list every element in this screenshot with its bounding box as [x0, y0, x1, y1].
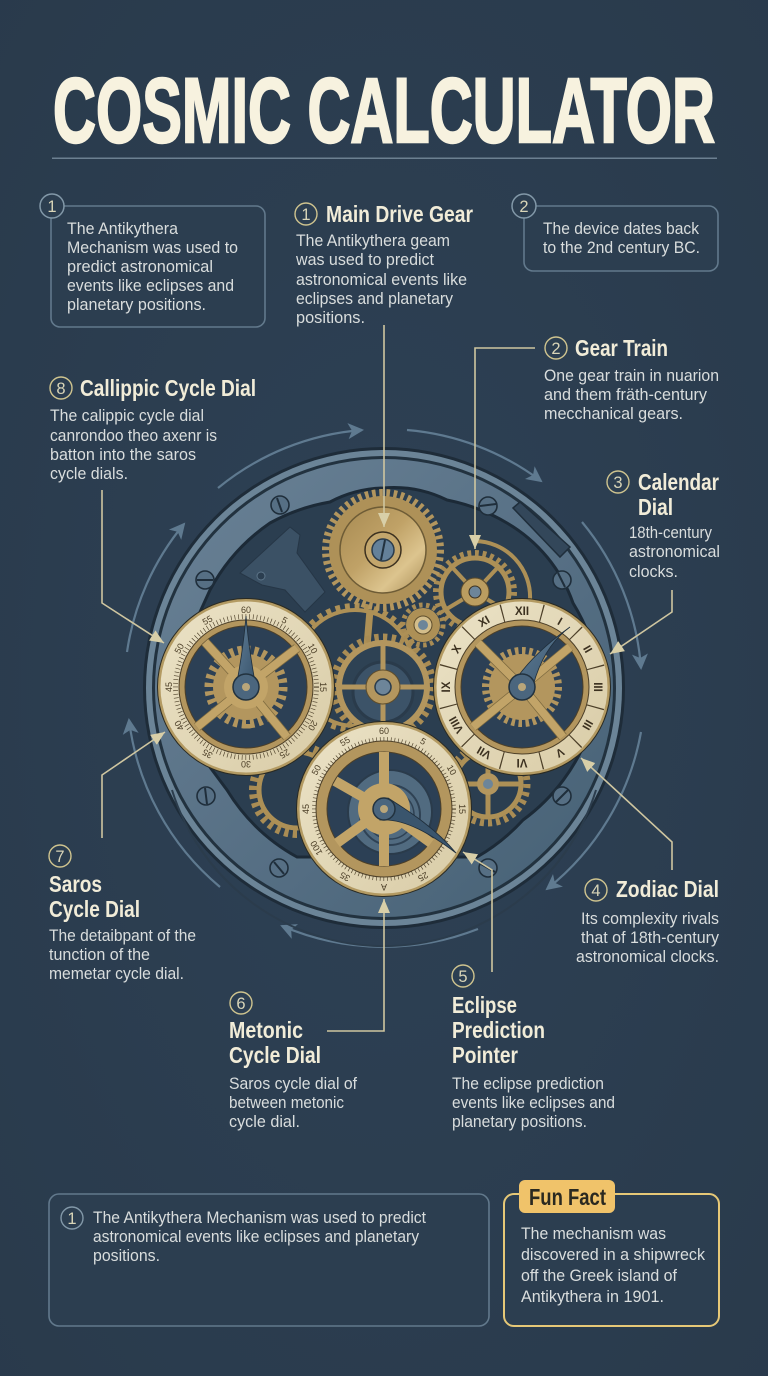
- gear: lower right: [449, 745, 527, 823]
- numerals: right dial: V: [553, 745, 566, 759]
- outer ring: [143, 447, 625, 946]
- badge 5: 5: [458, 968, 468, 986]
- badge 4: 4: [591, 882, 601, 900]
- badge: note number: 1: [67, 1210, 77, 1228]
- numerals: right dial: X: [450, 643, 464, 656]
- badge 6: 6: [236, 995, 246, 1013]
- numerals: right dial: II: [580, 644, 594, 655]
- text: box 1 copy: The Antikythera: [67, 219, 179, 238]
- numerals: right dial: VII: [475, 743, 494, 761]
- heading: Dial: [638, 494, 673, 520]
- description: mecchanical gears.: [544, 404, 683, 423]
- heading: Main Drive Gear: [326, 201, 473, 227]
- panel: fact box 1: [40, 194, 265, 327]
- heading: Eclipse: [452, 992, 517, 1018]
- text: fun fact copy: Antikythera in 1901.: [521, 1287, 664, 1306]
- inner opening: [160, 488, 598, 857]
- description: [229, 1074, 357, 1131]
- text: fun fact copy: The mechanism was: [521, 1224, 666, 1243]
- numerals: left dial: 15: [318, 682, 328, 692]
- badge: number 2: [512, 194, 536, 218]
- label: gear train: [544, 335, 719, 423]
- badge 5: [452, 965, 474, 987]
- text: note copy: [93, 1208, 426, 1265]
- numerals: right dial: III: [591, 682, 603, 692]
- numerals: right dial: IX: [441, 681, 453, 692]
- description: that of 18th-century: [581, 928, 719, 947]
- heading: Gear Train: [575, 335, 668, 361]
- heading: Saros: [49, 871, 102, 897]
- heading: Metonic: [229, 1017, 303, 1043]
- numerals: bottom dial: 60: [379, 726, 389, 736]
- title rule: [52, 158, 717, 159]
- description: One gear train in nuarion: [544, 366, 719, 385]
- description: astronomical clocks.: [576, 947, 719, 966]
- numerals: left dial: 35: [201, 747, 214, 761]
- badge: number 2: 2: [519, 198, 529, 216]
- panel: fun fact: [504, 1180, 719, 1326]
- numerals: bottom dial: 5: [418, 736, 428, 747]
- badge 7: [49, 845, 71, 867]
- description: [629, 523, 720, 581]
- description: planetary positions.: [452, 1112, 587, 1131]
- description: [576, 909, 719, 966]
- gear: center: [333, 637, 433, 737]
- numerals: bottom dial: [301, 726, 467, 892]
- numerals: left dial: 10: [306, 642, 320, 655]
- badge 2: 2: [551, 340, 561, 358]
- badge: fun fact: [519, 1180, 615, 1213]
- badge 1: 1: [301, 206, 311, 224]
- dial: left (callippic): [157, 598, 335, 776]
- numerals: left dial: 40: [172, 719, 186, 732]
- gear: main drive: [326, 493, 440, 607]
- description: [544, 366, 719, 423]
- label: calendar dial: [607, 469, 720, 581]
- numerals: bottom dial: 55: [338, 735, 352, 748]
- heading: [452, 992, 545, 1068]
- heading: Pointer: [452, 1042, 518, 1068]
- plate bridge: [240, 527, 325, 612]
- gear: gear train: [436, 553, 514, 631]
- numerals: left dial: 25: [278, 747, 291, 761]
- numerals: bottom dial: 50: [310, 763, 323, 777]
- description: batton into the saros: [50, 445, 196, 464]
- numerals: right dial: XII: [515, 606, 529, 618]
- numerals: bottom dial: 100: [308, 839, 325, 857]
- numerals: left dial: 45: [164, 682, 174, 692]
- numerals: right dial: III: [579, 717, 595, 732]
- numerals: right dial: VIII: [448, 714, 467, 735]
- badge: fun fact: Fun Fact: [529, 1184, 606, 1210]
- badge 7: 7: [55, 848, 65, 866]
- heading: [49, 871, 140, 922]
- label: eclipse prediction pointer: [452, 965, 615, 1131]
- label: callippic cycle dial: [50, 375, 256, 483]
- badge: number 1: 1: [47, 198, 57, 216]
- heading: Cycle Dial: [229, 1042, 321, 1068]
- description: astronomical: [629, 542, 720, 561]
- gear: lower left: [253, 746, 341, 834]
- panel: fact box 2: [512, 194, 718, 271]
- orbit arrows around mechanism: [127, 430, 641, 947]
- description: The eclipse prediction: [452, 1074, 604, 1093]
- badge 4: [585, 879, 607, 901]
- badge: number 1: [40, 194, 64, 218]
- description: Its complexity rivals: [581, 909, 719, 928]
- heading: Prediction: [452, 1017, 545, 1043]
- text: box 1 copy: events like eclipses and: [67, 276, 234, 295]
- badge 8: [50, 377, 72, 399]
- description: cycle dials.: [50, 464, 128, 483]
- numerals: left dial: 5: [280, 615, 289, 626]
- text: box 2 copy: to the 2nd century BC.: [543, 238, 700, 257]
- numerals: left dial: 50: [172, 642, 186, 655]
- heading: Calendar: [638, 469, 719, 495]
- panel: bottom note: [49, 1194, 489, 1326]
- heading: [229, 1017, 321, 1068]
- text: fun fact copy: [521, 1224, 705, 1306]
- label: zodiac dial: [576, 876, 719, 966]
- heading: Zodiac Dial: [616, 876, 719, 902]
- description: between metonic: [229, 1093, 344, 1112]
- dial: right (calendar): [433, 598, 611, 776]
- badge: note number: [61, 1207, 83, 1229]
- label: main drive gear: [295, 201, 473, 327]
- description: events like eclipses and: [452, 1093, 615, 1112]
- gear train: linkage arcs: [293, 541, 530, 730]
- numerals: bottom dial: A: [381, 882, 387, 892]
- description: canrondoo theo axenr is: [50, 426, 217, 445]
- description: memetar cycle dial.: [49, 964, 184, 983]
- text: box 2 copy: The device dates back: [543, 219, 699, 238]
- text: note copy: astronomical events like eclipses and planetary: [93, 1227, 419, 1246]
- screws: [196, 496, 571, 877]
- text: box 1 copy: Mechanism was used to: [67, 238, 238, 257]
- description: The detaibpant of the: [49, 926, 196, 945]
- text: box 2 copy: [543, 219, 700, 257]
- description: eclipses and planetary: [296, 289, 453, 308]
- heading: Callippic Cycle Dial: [80, 375, 256, 401]
- heading: Cycle Dial: [49, 896, 140, 922]
- text: fun fact copy: discovered in a shipwreck: [521, 1245, 705, 1264]
- description: The Antikythera geam: [296, 231, 450, 250]
- text: note copy: positions.: [93, 1246, 160, 1265]
- numerals: bottom dial: 45: [301, 804, 311, 814]
- numerals: right dial: VI: [517, 756, 527, 768]
- description: [50, 406, 217, 483]
- badge 2: [545, 337, 567, 359]
- numerals: left dial: [164, 605, 328, 769]
- numerals: right dial: XI: [477, 614, 492, 630]
- numerals: bottom dial: 10: [445, 763, 458, 777]
- description: [49, 926, 196, 983]
- badge 1: [295, 203, 317, 225]
- gear: small idler: [403, 605, 443, 645]
- description: [452, 1074, 615, 1131]
- numerals: left dial: 60: [241, 605, 251, 615]
- numerals: left dial: 20: [306, 719, 320, 732]
- description: Saros cycle dial of: [229, 1074, 357, 1093]
- description: tunction of the: [49, 945, 150, 964]
- numerals: bottom dial: 25: [416, 870, 430, 883]
- numerals: right dial: I: [555, 616, 564, 628]
- dial: bottom (metonic): [296, 721, 472, 897]
- numerals: left dial: 30: [241, 759, 251, 769]
- description: cycle dial.: [229, 1112, 300, 1131]
- label: saros cycle dial: [49, 845, 196, 983]
- mechanism illustration: [143, 447, 625, 946]
- description: and them fräth-century: [544, 385, 707, 404]
- numerals: right dial: [441, 606, 603, 768]
- description: [295, 231, 467, 327]
- badge 3: 3: [613, 474, 623, 492]
- badge 8: 8: [56, 380, 66, 398]
- description: clocks.: [629, 562, 678, 581]
- text: box 1 copy: predict astronomical: [67, 257, 213, 276]
- description: 18th-century: [629, 523, 712, 542]
- label: metonic cycle dial: [229, 992, 357, 1131]
- text: box 1 copy: planetary positions.: [67, 295, 206, 314]
- text: fun fact copy: off the Greek island of: [521, 1266, 677, 1285]
- heading: [638, 469, 719, 520]
- numerals: left dial: 55: [201, 613, 214, 627]
- numerals: bottom dial: 35: [338, 870, 352, 883]
- leader lines with arrows: [102, 325, 672, 1031]
- text: note copy: The Antikythera Mechanism was used to predict: [93, 1208, 426, 1227]
- description: positions.: [296, 308, 365, 327]
- text: box 1 copy: [67, 219, 238, 314]
- description: was used to predict: [295, 250, 434, 269]
- numerals: bottom dial: 15: [457, 804, 467, 814]
- description: The calippic cycle dial: [50, 406, 204, 425]
- description: astronomical events like: [296, 270, 467, 289]
